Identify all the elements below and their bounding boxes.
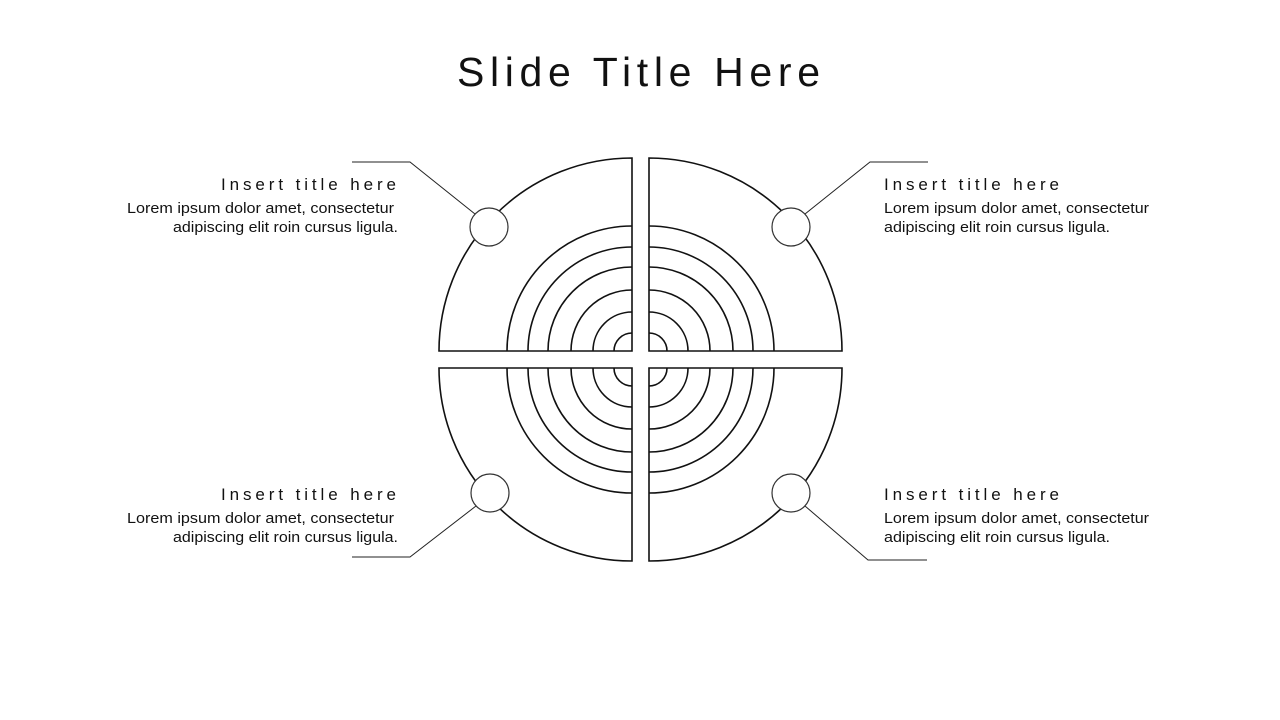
callout: bottom-left <box>127 474 509 557</box>
callout: bottom-right: Insert title here <box>884 485 1059 504</box>
callout: top-left: Lorem ipsum dolor amet, consectetur <box>127 200 394 217</box>
callout: top-right: Insert title here <box>884 175 1059 194</box>
callout: bottom-right <box>772 474 1149 560</box>
callout: bottom-left: Insert title here <box>221 485 396 504</box>
quadrant: bottom-left <box>439 368 632 561</box>
callout: bottom-right: adipiscing elit roin cursus ligula. <box>884 529 1110 546</box>
callout: bottom-left: Lorem ipsum dolor amet, consectetur <box>127 510 394 527</box>
callout: bottom-left: adipiscing elit roin cursus ligula. <box>173 529 398 546</box>
chart: segmented target <box>439 158 842 561</box>
callout: top-left: Insert title here <box>221 175 396 194</box>
callout: top-right: adipiscing elit roin cursus ligula. <box>884 219 1110 236</box>
title: Slide Title Here <box>457 49 820 95</box>
callout: bottom-right: Lorem ipsum dolor amet, consectetur <box>884 510 1149 527</box>
callout: top-right <box>772 162 1149 246</box>
quadrant: top-left <box>439 158 632 351</box>
callout: top-right: Lorem ipsum dolor amet, consectetur <box>884 200 1149 217</box>
callout: top-left <box>127 162 508 246</box>
quadrant: bottom-right <box>649 368 842 561</box>
quadrant: top-right <box>649 158 842 351</box>
callout: top-left: adipiscing elit roin cursus ligula. <box>173 219 398 236</box>
